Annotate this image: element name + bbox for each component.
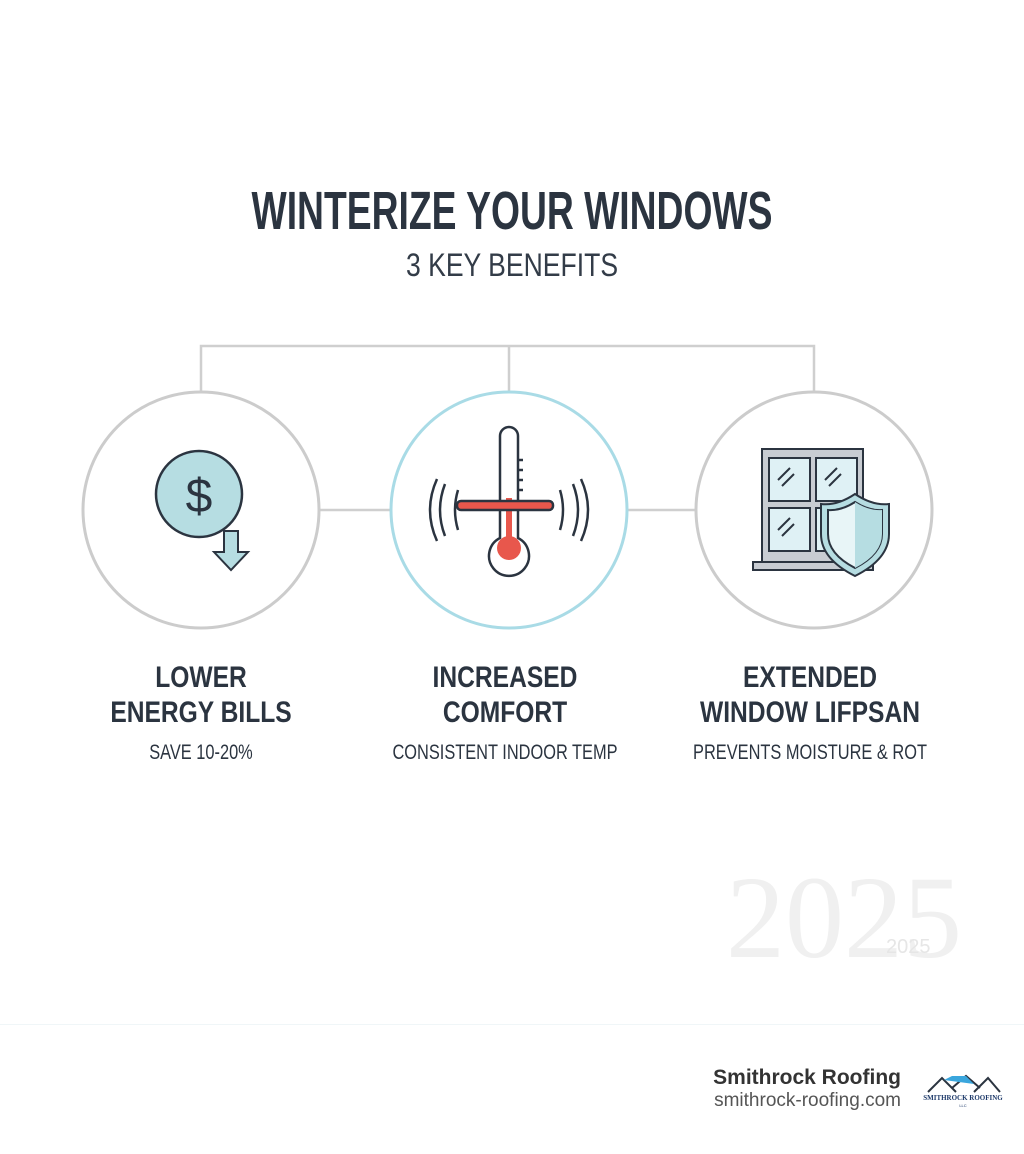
subtitle: 3 KEY BENEFITS [406, 247, 618, 283]
icon: dollar coin with down arrow [156, 451, 248, 570]
footer brand: Smithrock Roofing [713, 1066, 901, 1089]
icon: dollar coin with down arrow: $ [186, 470, 212, 523]
small year: 2025 [886, 936, 930, 958]
label: comfort: INCREASED [433, 661, 577, 694]
icon: thermometer [430, 427, 588, 576]
label: comfort: COMFORT [443, 696, 567, 729]
title: WINTERIZE YOUR WINDOWS [252, 181, 772, 241]
label: lifespan [700, 661, 920, 729]
sub: temp: CONSISTENT INDOOR TEMP [392, 741, 618, 764]
label: lower energy bills: ENERGY BILLS [110, 696, 292, 729]
sub: save: SAVE 10-20% [149, 741, 253, 764]
circle: lifespan [696, 392, 932, 628]
label: lower energy bills [110, 661, 292, 729]
logo: LLC [959, 1103, 967, 1108]
watermark year: 2025 [726, 852, 962, 983]
label: lifespan: EXTENDED [743, 661, 877, 694]
circle: energy bills [83, 392, 319, 628]
icon: window with shield [753, 449, 889, 576]
logo: SMITHROCK ROOFING [923, 1094, 1003, 1102]
logo [923, 1074, 1003, 1108]
label: lower energy bills: LOWER [155, 661, 247, 694]
footer brand: smithrock-roofing.com [714, 1090, 901, 1111]
label: comfort [433, 661, 577, 729]
sub: moisture: PREVENTS MOISTURE & ROT [693, 741, 927, 764]
circle: comfort [391, 392, 627, 628]
footer brand [713, 1066, 901, 1111]
label: lifespan: WINDOW LIFPSAN [700, 696, 920, 729]
